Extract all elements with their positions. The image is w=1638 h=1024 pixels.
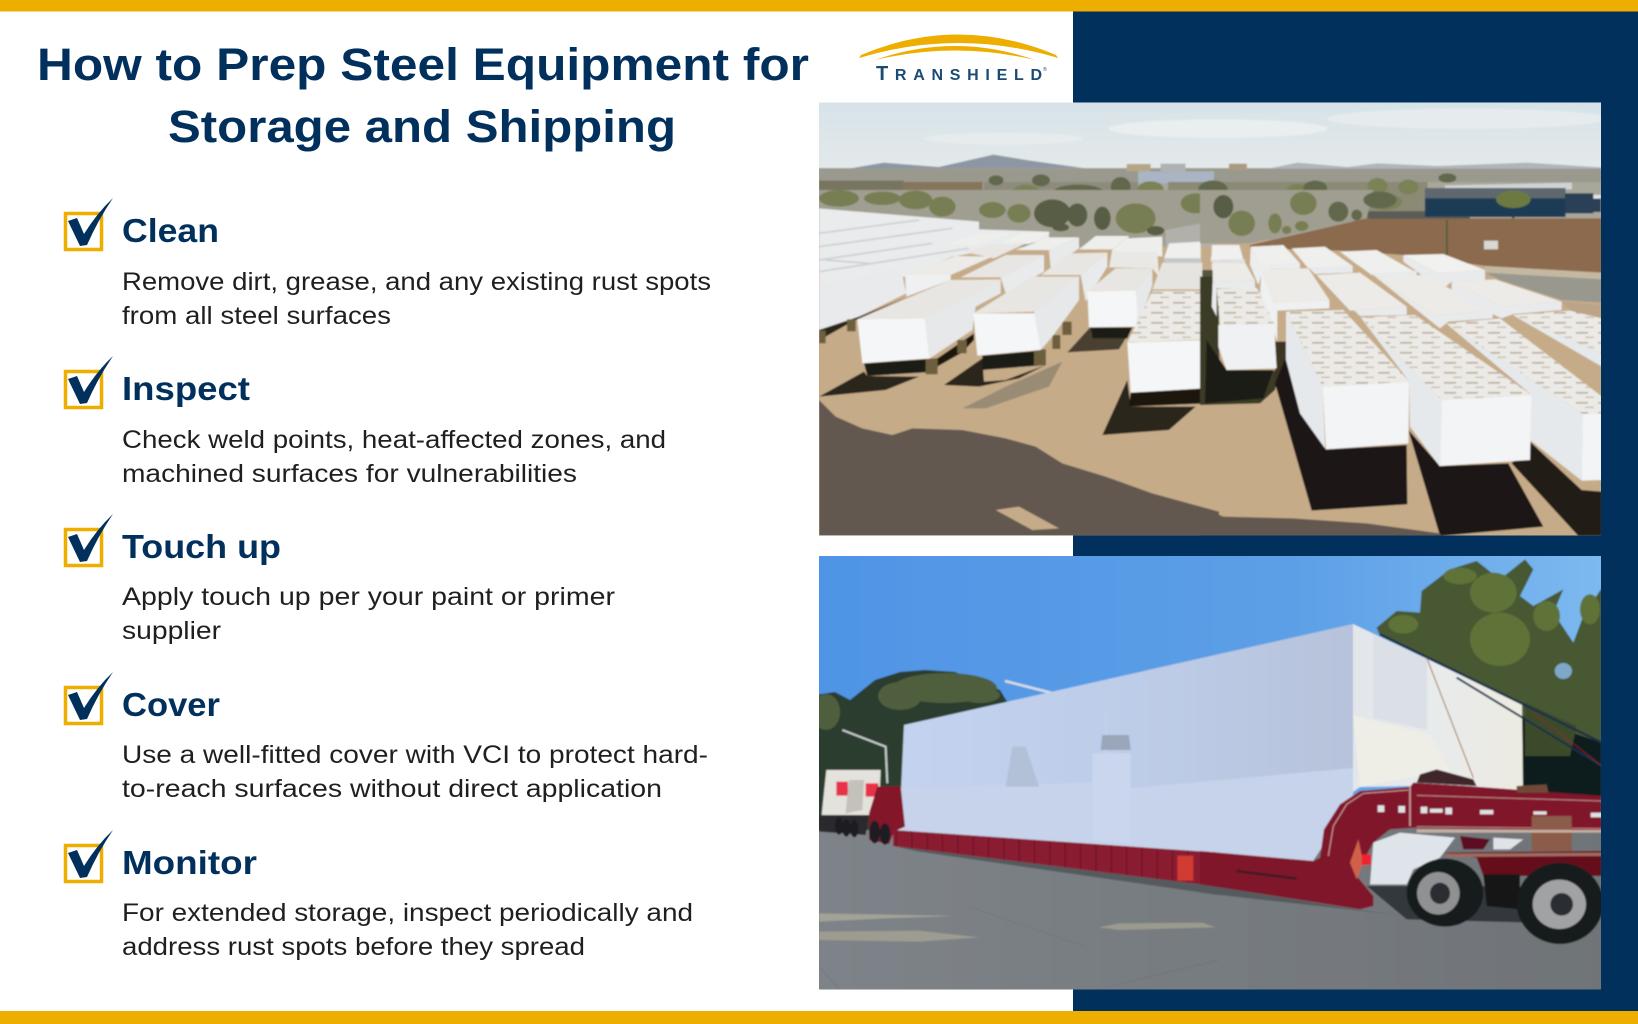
left half of the yard — [819, 190, 1219, 536]
horizon and tree line — [819, 109, 1607, 224]
logo: Transhield: T RANSHIELD — [876, 63, 1042, 85]
gooseneck, wheels and right trailer — [1200, 634, 1603, 944]
dark ground shadow — [819, 400, 1219, 536]
icon: checkbox — [66, 356, 113, 408]
text: Touch up description: supplier — [122, 617, 221, 645]
text: Cover description: Use a well-fitted cover with VCI to protect hard- — [122, 741, 708, 769]
text: Touch up description: Apply touch up per your paint or primer — [122, 583, 615, 611]
text: Inspect description: machined surfaces for vulnerabilities — [122, 460, 577, 488]
street lamp — [1005, 681, 1052, 693]
brown field — [1250, 218, 1602, 273]
photo: shrink-wrapped load on red trailer — [812, 552, 1605, 994]
logo: Transhield — [859, 34, 1058, 85]
shadows — [1275, 357, 1407, 511]
icon: checkbox — [66, 198, 113, 250]
step: Touch up — [66, 514, 615, 645]
text: Monitor description — [122, 899, 693, 961]
trailer deck end and gooseneck — [1200, 783, 1602, 909]
right tree — [1377, 559, 1602, 796]
title — [37, 39, 809, 152]
box C — [1067, 327, 1132, 352]
box B — [944, 358, 1046, 387]
wheels — [1407, 859, 1483, 927]
right half of the yard — [1200, 190, 1602, 537]
back row boxes — [905, 256, 992, 275]
step: Monitor — [66, 830, 693, 961]
icon: checkbox — [66, 672, 113, 724]
second row — [1213, 263, 1255, 282]
left side detail and truck — [819, 728, 1216, 942]
load front face — [900, 623, 1354, 789]
navy panel behind photos — [1073, 11, 1638, 1011]
text: Clean description — [122, 268, 711, 330]
shadow under deck — [896, 846, 1200, 892]
box G — [1361, 315, 1532, 400]
text: Inspect description — [122, 426, 666, 488]
icon: checkbox — [66, 514, 113, 566]
photo: covered equipment in storage yard — [815, 98, 1607, 540]
bottom yellow bar — [0, 1011, 1638, 1024]
box E3 — [1217, 288, 1274, 325]
road beside the field — [1485, 266, 1602, 279]
title: How to Prep Steel Equipment for — [37, 39, 809, 90]
distant building — [1445, 183, 1572, 189]
heading: Cover: Cover — [122, 686, 220, 723]
step: Inspect — [66, 356, 666, 488]
heading: Clean: Clean — [122, 212, 219, 249]
guy lines and rope — [1380, 634, 1602, 743]
text: Touch up description — [122, 583, 615, 645]
back row — [1211, 245, 1243, 260]
heading: Inspect: Inspect — [122, 370, 250, 407]
step: Cover — [66, 672, 708, 803]
box A — [819, 372, 919, 397]
dark ground between boxes — [1200, 277, 1280, 405]
left mass of covers — [819, 208, 1049, 285]
text: Inspect description: Check weld points, heat-affected zones, and — [122, 426, 666, 454]
deck — [893, 830, 1219, 887]
heading: Monitor: Monitor — [122, 844, 257, 881]
text: Clean description: Remove dirt, grease, and any existing rust spots — [122, 268, 711, 296]
left trees — [815, 670, 1008, 830]
road sun patches — [819, 913, 956, 922]
load side face — [1353, 624, 1523, 792]
box I — [1513, 311, 1602, 353]
logo: Transhield: ® — [1043, 66, 1047, 73]
icon: checkbox — [66, 830, 113, 882]
text: Monitor description: address rust spots before they spread — [122, 933, 585, 961]
top yellow bar — [0, 0, 1638, 12]
box D — [1102, 380, 1196, 435]
text: Monitor description: For extended storage, inspect periodically and — [122, 899, 693, 927]
box H — [1446, 318, 1602, 414]
text: Clean description: from all steel surfaces — [122, 302, 391, 330]
text: Cover description: to-reach surfaces without direct application — [122, 775, 662, 803]
heading: Touch up: Touch up — [122, 528, 281, 565]
step: Clean — [66, 198, 711, 330]
title: Storage and Shipping — [168, 101, 676, 152]
box F — [1286, 310, 1409, 387]
truck — [822, 770, 881, 815]
white load under gooseneck — [1370, 833, 1455, 884]
text: Cover description — [122, 741, 708, 803]
